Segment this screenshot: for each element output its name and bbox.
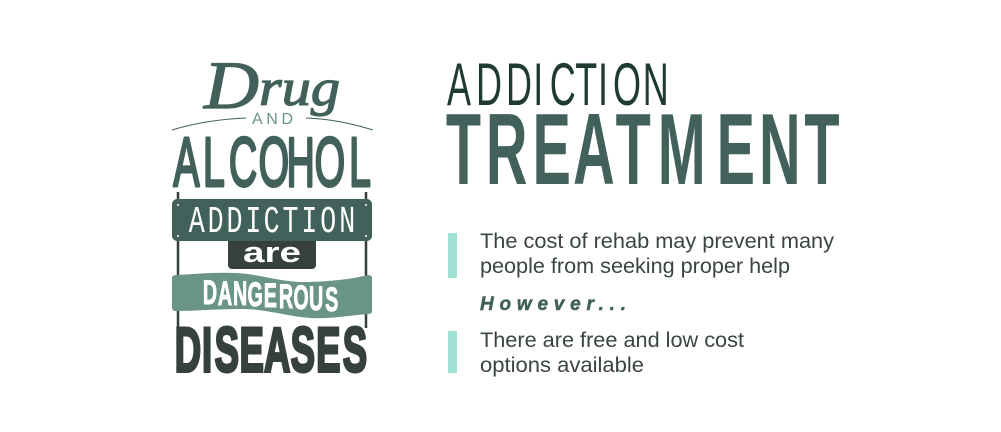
paragraph 2: [480, 329, 744, 377]
banner: DANGEROUS: DANGEROUS: [203, 273, 338, 318]
plate: ADDICTION: ADDICTION: [189, 201, 355, 244]
plate: are: [228, 237, 316, 269]
hanging rods: [178, 192, 366, 328]
heading: ADDICTION TREATMENT: [446, 52, 840, 206]
accent bar 1: [448, 233, 457, 278]
paragraph 1: The cost of rehab may prevent many: [480, 230, 835, 253]
paragraph 2: There are free and low cost: [480, 329, 744, 352]
word: AND: AND: [252, 111, 293, 128]
word: DISEASES: DISEASES: [175, 314, 367, 385]
script word: Drug: D: [203, 47, 259, 123]
curved rule right: [306, 118, 373, 130]
curved rule left: [172, 118, 246, 130]
accent bar 2: [448, 331, 457, 373]
panel: body copy: [448, 230, 835, 377]
panel: typographic badge: [172, 47, 373, 385]
word: ALCOHOL: ALCOHOL: [173, 124, 371, 202]
heading line: ADDICTION: ADDICTION: [447, 52, 669, 118]
paragraph 2: options available: [480, 354, 644, 377]
plate: are: are: [243, 237, 301, 269]
script word: Drug: rug: [259, 60, 340, 117]
heading line: TREATMENT: TREATMENT: [446, 94, 840, 206]
banner: DANGEROUS: [172, 273, 372, 318]
paragraph 1: [480, 230, 835, 278]
paragraph 1: people from seeking proper help: [480, 255, 790, 278]
emphasis: However: However...: [480, 294, 626, 315]
